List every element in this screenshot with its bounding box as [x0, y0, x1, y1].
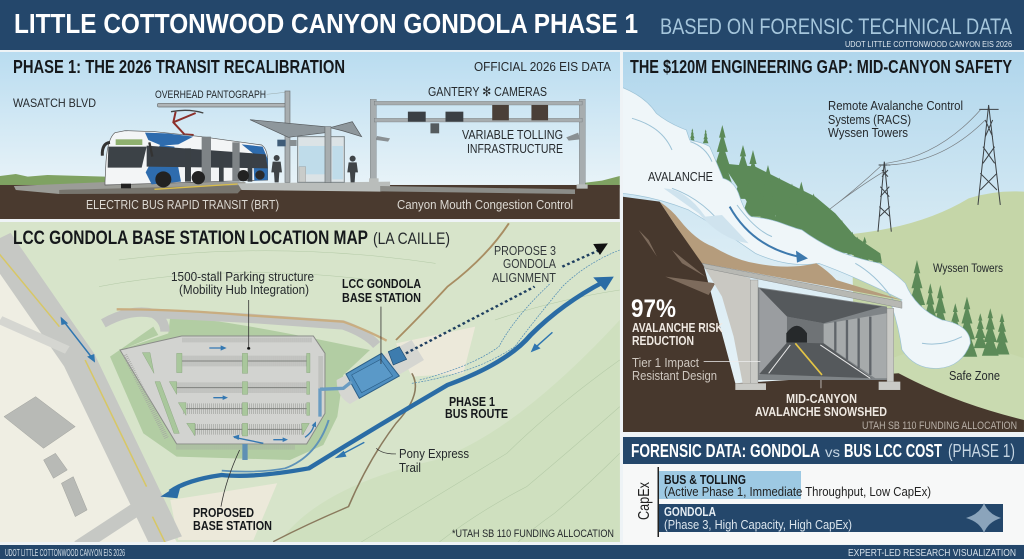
label: RACS: Systems (RACS)	[828, 112, 911, 127]
comparison heading bar: FORENSIC DATA: GONDOLA	[631, 441, 820, 461]
label: Wyssen towers: Wyssen Towers	[933, 261, 1003, 275]
label: phase 1 bus route: PHASE 1	[449, 394, 495, 409]
gondola alignment dotted line	[406, 243, 608, 353]
source note: UDOT LITTLE COTTONWOOD CANYON EIS 2026	[845, 40, 1012, 49]
panel: forensic cost comparison	[623, 437, 1024, 544]
illustration: avalanche and snowshed	[622, 87, 1024, 434]
dark rock ground	[622, 197, 1024, 434]
label: phase 1 bus route: BUS ROUTE	[445, 406, 508, 421]
label: variable tolling infrastructure: INFRASTRUCTURE	[467, 141, 563, 156]
label: gantry cameras: GANTERY ✻ CAMERAS	[428, 84, 547, 99]
bar: bus and tolling	[659, 471, 931, 499]
green buffer	[110, 318, 370, 460]
route and alignment overlays	[61, 243, 614, 507]
label: gondola alignment: ALIGNMENT	[492, 271, 556, 285]
stat label: AVALANCHE RISK	[632, 320, 723, 335]
label: proposed base station: PROPOSED	[193, 505, 254, 520]
label: variable tolling infrastructure: VARIABLE TOLLING	[462, 127, 563, 142]
parking structure	[120, 336, 325, 447]
bar: bus and tolling: BUS & TOLLING	[664, 472, 746, 487]
label: Wasatch Blvd: WASATCH BLVD	[13, 96, 96, 110]
snow flow	[622, 87, 970, 368]
map base terrain	[0, 223, 620, 547]
icon: snowshed	[702, 263, 902, 390]
icon: gondola base station	[242, 340, 424, 460]
illustration: bus and shelter	[102, 91, 362, 188]
panel: mid-canyon safety	[622, 52, 1024, 434]
stat label: REDUCTION	[632, 333, 694, 348]
label: avalanche: AVALANCHE	[648, 170, 713, 184]
leader lines	[221, 300, 396, 507]
icon: Wyssen towers	[825, 105, 1000, 232]
label: congestion control: Canyon Mouth Congestion Control	[397, 197, 573, 212]
label: Pony Express Trail: Pony Express	[399, 446, 469, 461]
illustration: ground and gantry	[0, 99, 620, 220]
buildings	[4, 397, 87, 517]
label: gondola alignment: GONDOLA	[503, 257, 557, 271]
stat: 97 percent: 97%	[631, 295, 676, 323]
bar: bus and tolling: (Active Phase 1, Immediate Throughput, Low CapEx)	[664, 484, 931, 499]
bar: gondola: GONDOLA	[664, 504, 716, 519]
heading: LCC GONDOLA BASE STATION LOCATION MAP	[13, 228, 368, 249]
tan slope	[660, 202, 902, 300]
main title: LITTLE COTTONWOOD CANYON GONDOLA PHASE 1	[14, 8, 638, 39]
label: LCC gondola base station: LCC GONDOLA	[342, 276, 421, 291]
footer bar	[0, 545, 1024, 559]
bar: gondola: (Phase 3, High Capacity, High CapEx)	[664, 517, 852, 532]
comparison heading bar	[623, 437, 1024, 464]
access road	[103, 312, 377, 345]
data source label: OFFICIAL 2026 EIS DATA	[474, 59, 611, 74]
label: overhead pantograph: OVERHEAD PANTOGRAPH	[155, 89, 266, 101]
highway	[0, 240, 166, 547]
parking site plan	[103, 309, 424, 460]
funding footnote: *UTAH SB 110 FUNDING ALLOCATION	[452, 528, 614, 540]
panel: phase 1 transit recalibration	[0, 52, 620, 220]
label: proposed base station: BASE STATION	[193, 518, 272, 533]
label: parking structure: 1500-stall Parking structure	[171, 270, 314, 284]
icon: waiting passengers	[271, 155, 358, 182]
icon: electric articulated bus	[102, 131, 268, 188]
label: snowshed: MID-CANYON	[786, 391, 857, 406]
icon: four point star	[966, 503, 1001, 533]
label: RACS: Wyssen Towers	[828, 125, 908, 140]
flow arrow	[730, 207, 799, 257]
header banner	[0, 0, 1024, 50]
axis label: CapEx	[636, 482, 653, 520]
icon: overhead pantograph wire	[157, 91, 290, 182]
heading location note: (LA CAILLE)	[373, 229, 450, 248]
bar: gondola	[659, 503, 1003, 533]
phase 1 bus route	[61, 277, 614, 498]
hillside	[852, 191, 1024, 434]
comparison heading bar: vs	[825, 444, 840, 460]
label: gondola alignment: PROPOSE 3	[494, 244, 556, 258]
label: impact design: Resistant Design	[632, 369, 717, 383]
label: electric BRT: ELECTRIC BUS RAPID TRANSIT (BRT)	[86, 197, 279, 212]
axis line	[658, 467, 659, 537]
label: snowshed: AVALANCHE SNOWSHED	[755, 404, 887, 419]
label: safe zone: Safe Zone	[949, 368, 1000, 383]
label: RACS: Remote Avalanche Control	[828, 98, 963, 113]
label: impact design: Tier 1 Impact	[632, 356, 699, 370]
label: LCC gondola base station: BASE STATION	[342, 290, 421, 305]
footer bar: UDOT LITTLE COTTONWOOD CANYON EIS 2026	[5, 547, 125, 559]
label: parking structure: (Mobility Hub Integration)	[179, 283, 309, 297]
icon: tolling gantry with cameras	[369, 99, 588, 189]
icon: bus shelter	[250, 120, 362, 183]
comparison heading bar: BUS LCC COST	[844, 441, 942, 461]
conifer trees	[690, 125, 1009, 357]
heading: PHASE 1: THE 2026 TRANSIT RECALIBRATION	[13, 57, 345, 77]
label: Pony Express Trail: Trail	[399, 460, 421, 475]
panel: base station location map	[0, 222, 620, 547]
